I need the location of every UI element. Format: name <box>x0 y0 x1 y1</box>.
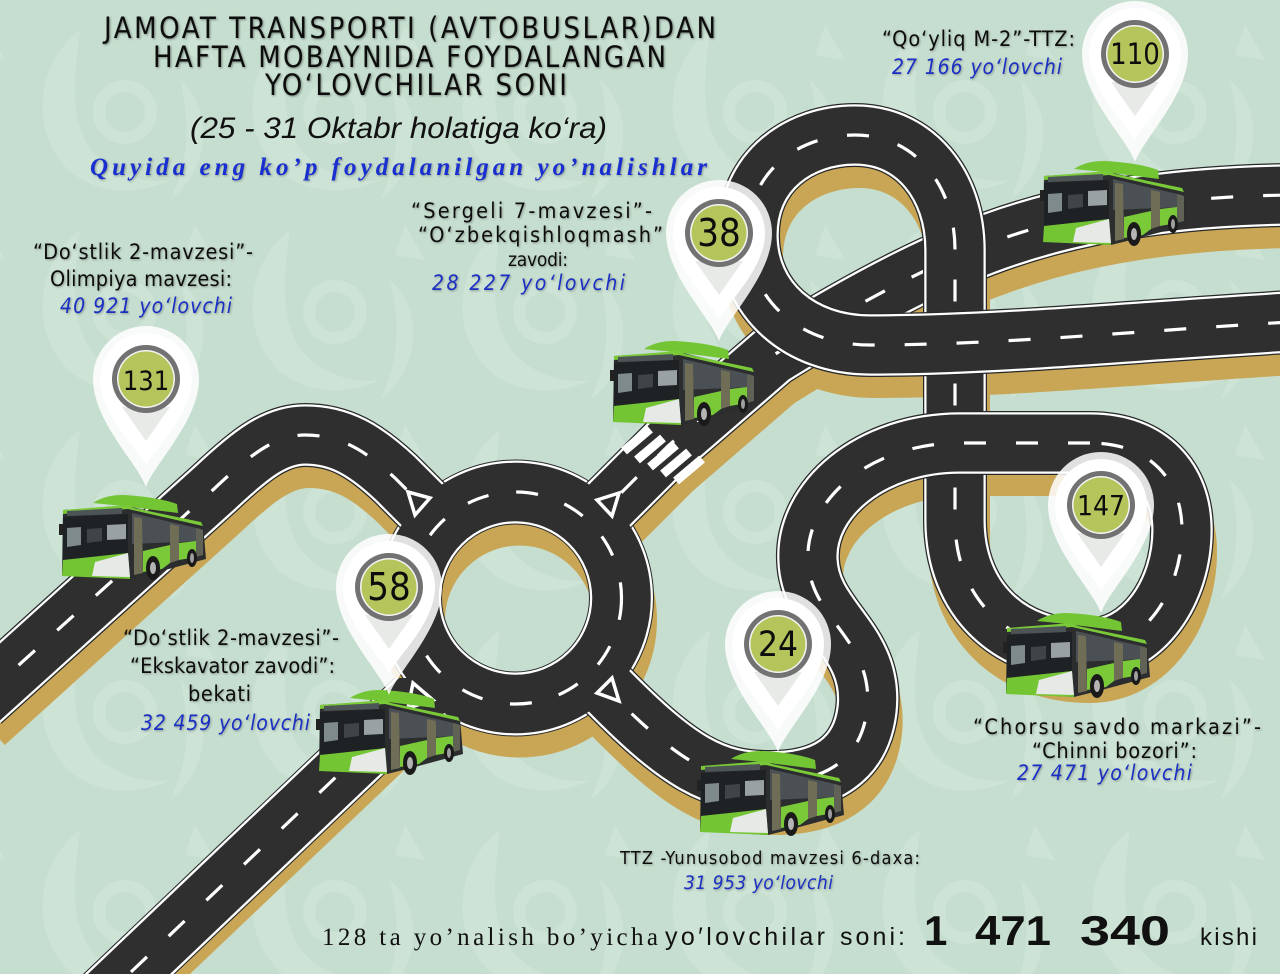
subheading: Quyida eng ko’p foydalanilgan yo’nalishlar <box>90 154 707 181</box>
label 147: 27 471 yo‘lovchi <box>1017 761 1193 785</box>
title: YO‘LOVCHILAR SONI <box>264 68 567 102</box>
pin 147 <box>1048 452 1154 613</box>
label 147 <box>973 715 1261 785</box>
footer total: yo′lovchilar <box>665 923 825 951</box>
label 110 <box>882 27 1075 79</box>
pin 110 <box>1082 1 1188 162</box>
title: JAMOAT TRANSPORTI (AVTOBUSLAR)DAN <box>102 11 716 45</box>
date subtitle: (25 - 31 Oktabr holatiga ko‘ra) <box>190 112 607 145</box>
pin 58 <box>336 534 442 695</box>
label 110: “Qo‘yliq M-2”-TTZ: <box>882 27 1075 52</box>
route 110 <box>882 1 1188 246</box>
bus 110 <box>1040 161 1187 246</box>
route 58 <box>123 534 463 775</box>
title: HAFTA MOBAYNIDA FOYDALANGAN <box>153 40 666 74</box>
footer total: 128 ta yo’nalish bo’yicha <box>322 924 658 951</box>
bus 58 <box>316 690 463 775</box>
pin 131 <box>93 326 199 487</box>
bus 147 <box>1003 613 1150 698</box>
label 24: TTZ -Yunusobod mavzesi 6-daxa: <box>619 848 920 869</box>
label 58 <box>123 626 339 735</box>
pin 131: 131 <box>123 366 169 397</box>
label 38 <box>411 199 663 295</box>
pin 147: 147 <box>1077 489 1125 522</box>
footer total: 1 <box>924 907 947 954</box>
label 24 <box>619 848 920 894</box>
label 38: 28 227 yo‘lovchi <box>432 271 626 295</box>
route 24 <box>619 591 920 894</box>
footer total: kishi <box>1200 924 1257 951</box>
label 147: “Chorsu savdo markazi”- <box>973 715 1261 740</box>
label 58: 32 459 yo‘lovchi <box>141 711 311 735</box>
label 110: 27 166 yo‘lovchi <box>892 55 1063 79</box>
footer total: 340 <box>1080 907 1170 954</box>
label 38: zavodi: <box>508 249 568 271</box>
label 147: “Chinni bozori”: <box>1032 739 1197 764</box>
pin 24: 24 <box>758 625 798 665</box>
footer total <box>322 907 1257 954</box>
label 58: “Do‘stlik 2-mavzesi”- <box>123 626 339 651</box>
pin 58: 58 <box>367 565 411 609</box>
route 131 <box>33 240 253 580</box>
pin 24 <box>725 591 831 752</box>
footer total: soni: <box>840 923 905 951</box>
bus 131 <box>59 495 206 580</box>
label 58: bekati <box>188 682 251 707</box>
label 131: 40 921 yo‘lovchi <box>60 294 233 318</box>
title <box>102 11 716 102</box>
footer total: 471 <box>975 907 1051 954</box>
bus 24 <box>697 751 844 836</box>
label 131: “Do‘stlik 2-mavzesi”- <box>33 240 253 265</box>
label 38: “Sergeli 7-mavzesi”- <box>411 199 652 224</box>
label 24: 31 953 yo‘lovchi <box>684 872 833 894</box>
label 58: “Ekskavator zavodi”: <box>130 654 335 679</box>
crosswalk <box>624 429 702 481</box>
roundabout yield triangles <box>408 492 619 708</box>
pin 38 <box>666 180 772 341</box>
label 131: Olimpiya mavzesi: <box>50 267 232 292</box>
bus 38 <box>610 341 757 426</box>
label 131 <box>33 240 253 318</box>
route 38 <box>411 180 772 426</box>
pin 110: 110 <box>1110 37 1160 71</box>
route 147 <box>973 452 1261 785</box>
label 38: “O‘zbekqishloqmash” <box>418 223 663 248</box>
pin 38: 38 <box>697 211 741 255</box>
